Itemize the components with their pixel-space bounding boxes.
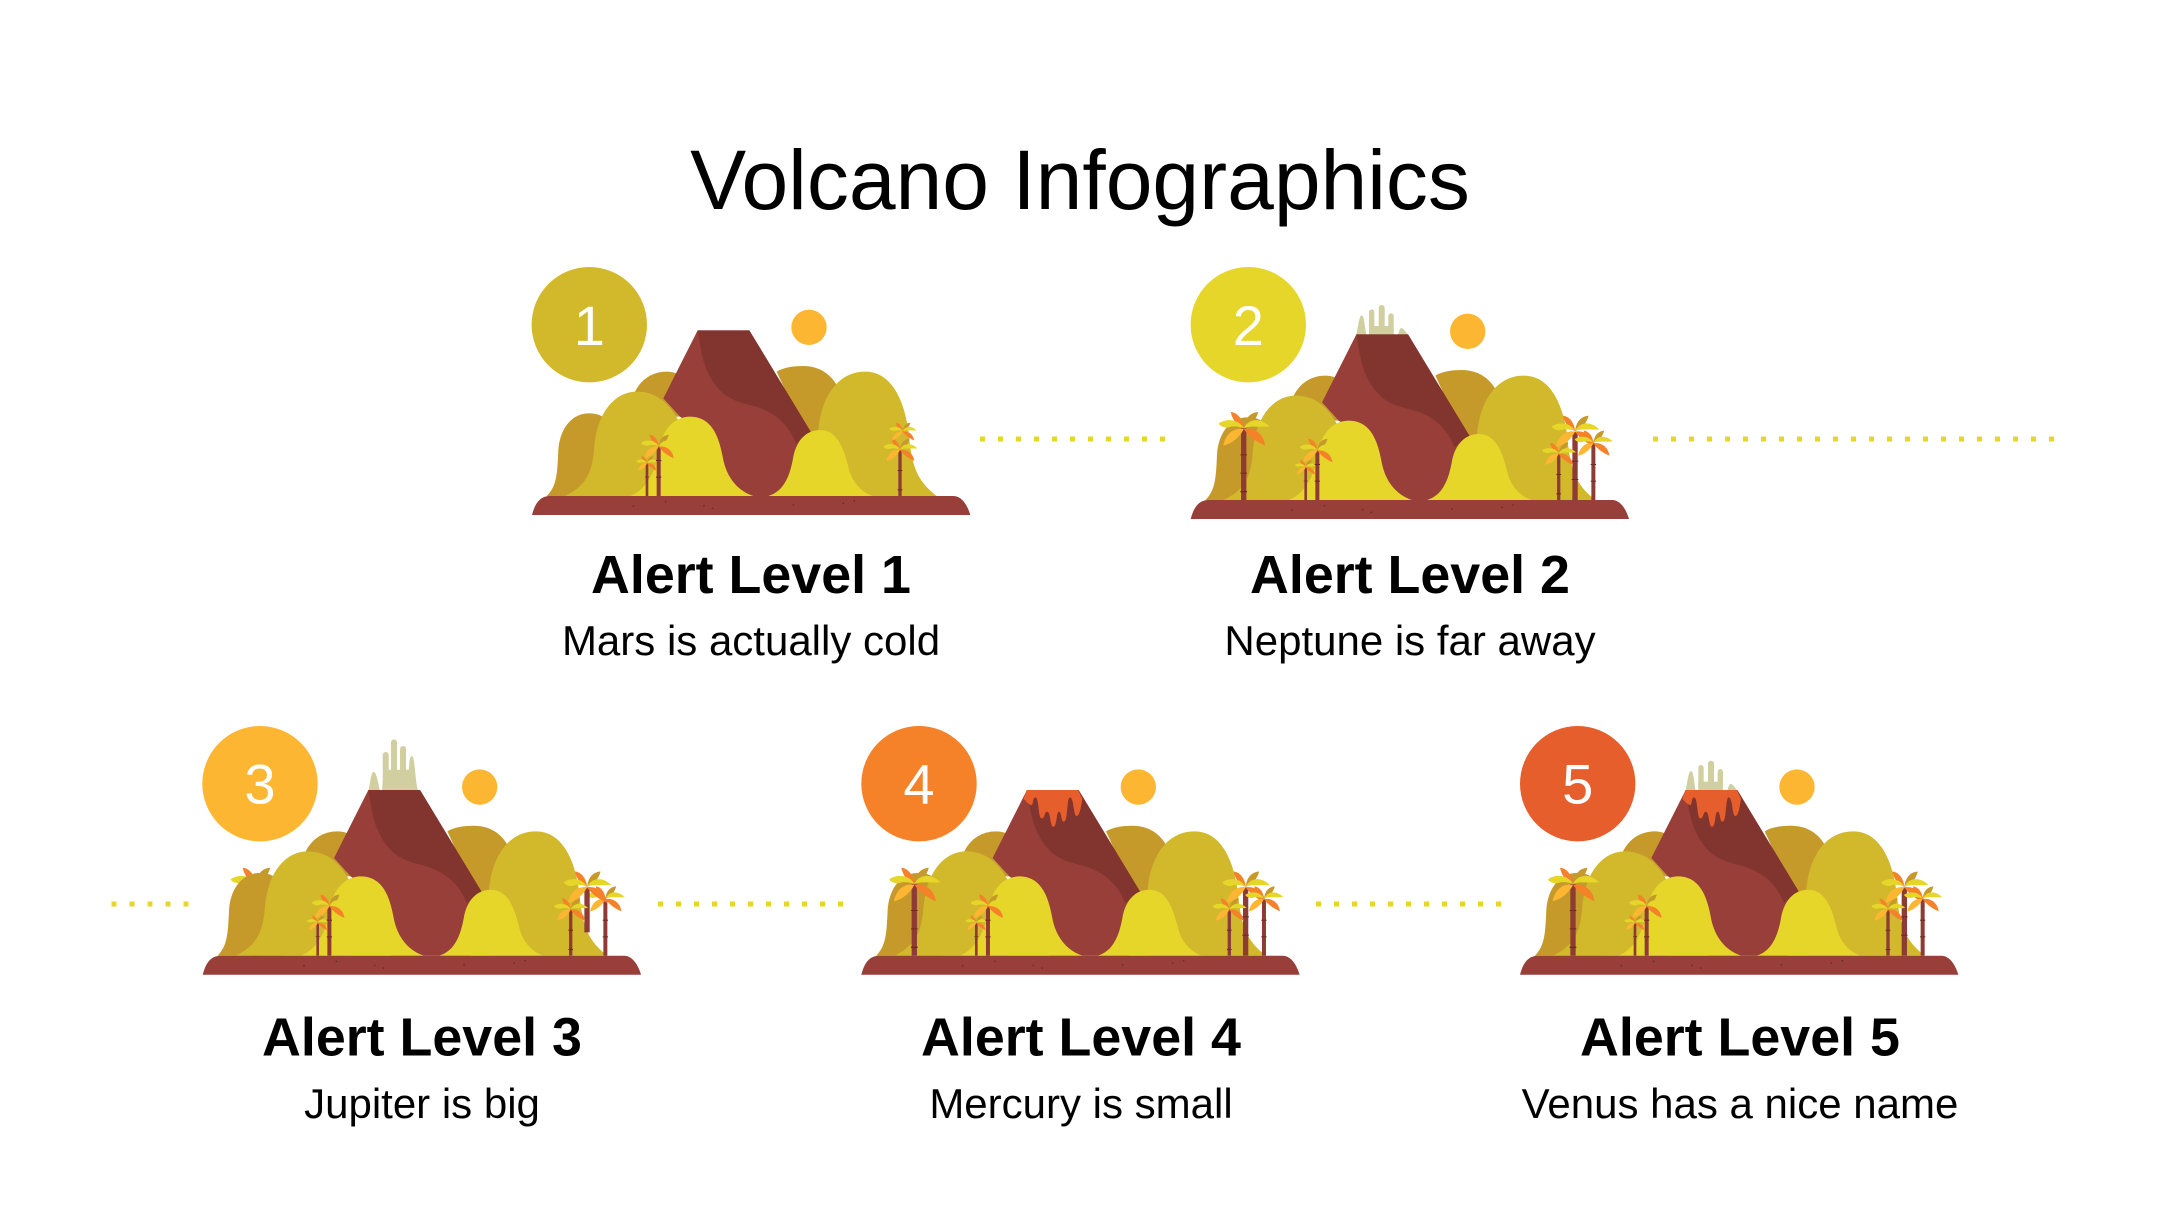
heading 2: Alert Level 2 [1250,545,1570,605]
panel: alert level 3 [202,726,641,1127]
dotted connector: level 3 to level 4 [658,902,848,906]
description 1: Mars is actually cold [562,617,940,664]
number badge 5: 5 [1562,752,1593,816]
dotted connector: level 1 to level 2 [980,436,1170,442]
number badge 3: 3 [244,752,276,816]
number badge 4: 4 [903,752,935,816]
description 4: Mercury is small [929,1080,1233,1127]
panel: alert level 2 [1191,267,1629,664]
volcano illustration 2 [1191,305,1629,519]
heading 3: Alert Level 3 [262,1008,582,1068]
heading 5: Alert Level 5 [1580,1008,1900,1068]
volcano illustration 5 [1520,761,1958,975]
number badge 2 [1191,267,1306,382]
number badge 1: 1 [574,294,605,357]
volcano illustration 4 [861,769,1300,975]
title: Volcano Infographics [690,133,1470,227]
dotted connector: level 4 to level 5 [1316,902,1506,906]
number badge 4 [861,726,977,841]
heading 1: Alert Level 1 [591,545,911,605]
number badge 5 [1520,726,1635,841]
volcano illustration 1 [532,310,970,515]
panel: alert level 5 [1520,726,1958,1127]
dotted connector: into level 3 [112,902,193,906]
description 3: Jupiter is big [304,1080,540,1127]
description 2: Neptune is far away [1224,617,1596,664]
number badge 1 [532,267,647,382]
panel: alert level 1 [532,267,970,664]
panel: alert level 4 [861,726,1300,1127]
heading 4: Alert Level 4 [921,1008,1241,1068]
description 5: Venus has a nice name [1522,1080,1958,1127]
number badge 2: 2 [1233,294,1264,357]
dotted connector: level 2 outward [1653,436,2058,442]
volcano illustration 3 [203,739,641,975]
number badge 3 [202,726,318,841]
